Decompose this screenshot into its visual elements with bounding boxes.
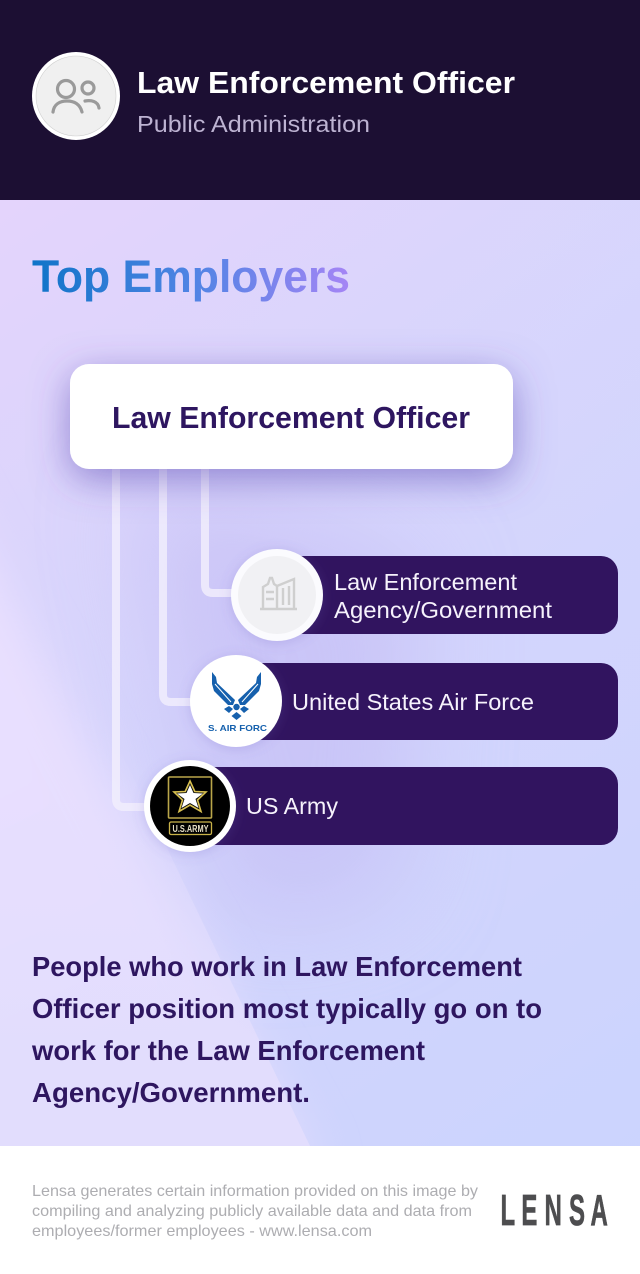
pill xyxy=(230,663,618,740)
label: Agency/Government xyxy=(334,597,552,623)
summary text: Agency/Government. xyxy=(32,1077,310,1108)
card: root role xyxy=(70,364,513,469)
heading: Top Employers: Top Employers xyxy=(32,251,350,302)
employer row: Law Enforcement Agency/Government xyxy=(231,549,618,641)
icon: people avatar xyxy=(32,52,120,140)
icon: army logo: U.S.ARMY xyxy=(172,824,209,835)
icon: building xyxy=(231,549,323,641)
label: Law Enforcement xyxy=(334,569,517,595)
card: root role: Law Enforcement Officer xyxy=(112,401,470,435)
summary text: Officer position most typically go on to xyxy=(32,993,542,1024)
icon: air force logo xyxy=(190,655,282,747)
employer row: US Army xyxy=(144,760,618,852)
summary text: People who work in Law Enforcement xyxy=(32,951,522,982)
background panel xyxy=(0,200,640,1170)
icon: air force logo: S. AIR FORC xyxy=(208,723,267,733)
disclaimer text: Lensa generates certain information provided on this image by xyxy=(32,1183,478,1200)
icon: army logo xyxy=(144,760,236,852)
label: United States Air Force xyxy=(292,689,534,715)
pill xyxy=(190,767,618,845)
disclaimer text: compiling and analyzing publicly available data and data from xyxy=(32,1203,472,1220)
label: US Army xyxy=(246,793,338,819)
disclaimer text: employees/former employees - www.lensa.com xyxy=(32,1223,372,1240)
header band xyxy=(0,0,640,200)
logo: LENSA: LENSA xyxy=(501,1187,608,1235)
header subtitle: Public Administration xyxy=(137,111,370,137)
employer row: United States Air Force xyxy=(190,655,618,747)
footer panel xyxy=(0,1146,640,1274)
connector lines xyxy=(116,465,240,807)
pill xyxy=(270,556,618,634)
summary text: work for the Law Enforcement xyxy=(31,1035,425,1066)
header title: Law Enforcement Officer xyxy=(137,65,515,100)
